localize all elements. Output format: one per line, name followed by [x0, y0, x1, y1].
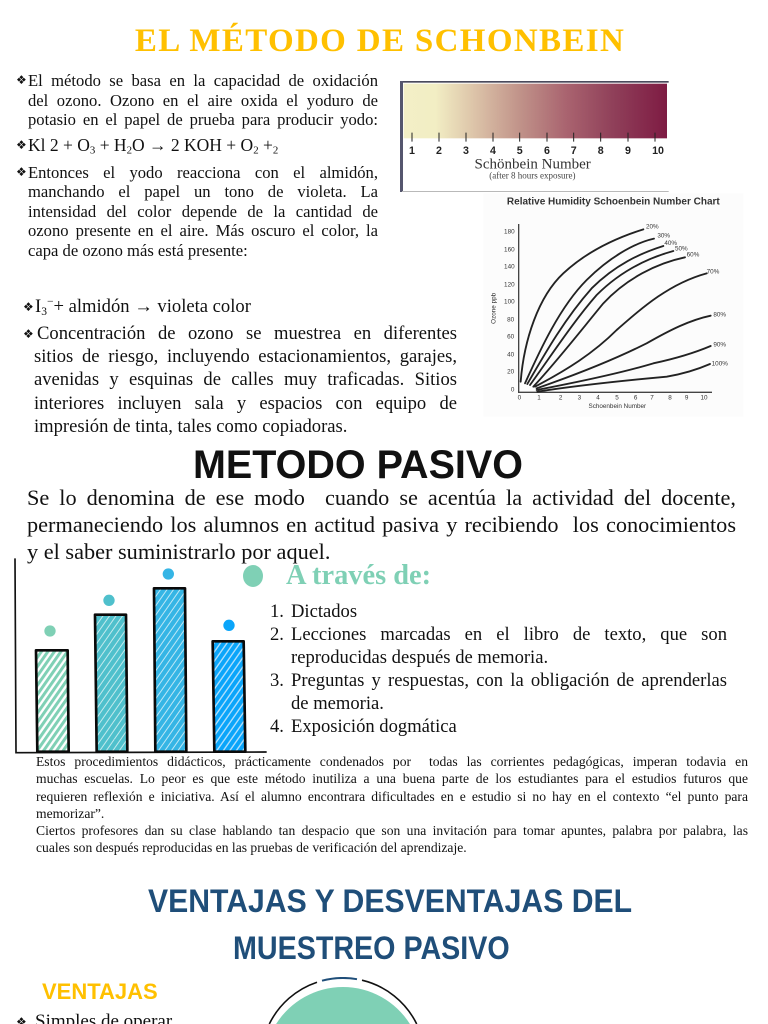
numbered list: passive procedures: reproducidas después de memoria. — [291, 647, 548, 668]
line chart: relative humidity Schoenbein number chart: 8 — [668, 394, 672, 401]
line chart: relative humidity Schoenbein number chart: 20% — [646, 223, 659, 230]
line chart: relative humidity Schoenbein number chart: 60% — [687, 252, 700, 259]
line chart: relative humidity Schoenbein number chart: 2 — [559, 394, 563, 401]
text block: starch reaction: ❖ — [16, 165, 27, 179]
line chart: relative humidity Schoenbein number chart: 80 — [507, 316, 515, 323]
text block: passive method definition: permaneciendo los alumnos en actitud pasiva y recibiendo los conocimientos — [27, 512, 736, 537]
color scale: Schönbein number strip: 10 — [652, 145, 664, 157]
line chart: relative humidity Schoenbein number chart: 40% — [664, 240, 677, 247]
heading: Metodo pasivo: METODO PASIVO — [193, 443, 523, 487]
numbered list: passive procedures: Lecciones marcadas en el libro de texto, que son — [291, 624, 727, 645]
color scale: Schönbein number strip: 1 — [409, 145, 415, 157]
line chart: relative humidity Schoenbein number chart: 70% — [707, 268, 720, 275]
title: El método de Schonbein: EL MÉTODO DE SCHONBEIN — [135, 23, 625, 59]
numbered list: passive procedures: de memoria. — [291, 693, 384, 714]
text block: starch reaction: ozono presente en el aire. Más oscuro el color, la — [28, 221, 378, 240]
text block: commentary on didactic procedures: memorizar”. — [36, 806, 104, 821]
line chart: relative humidity Schoenbein number chart: 0 — [511, 386, 515, 393]
text block: commentary on didactic procedures: Estos procedimientos didácticos, prácticamente condenados por todas las corrientes pedagógicas, imperan todavia en — [36, 754, 748, 769]
text block: starch reaction: capa de ozono más está presente: — [28, 241, 248, 260]
line chart: relative humidity Schoenbein number chart: 100 — [504, 299, 515, 306]
text block: commentary on didactic procedures: requieren reflexión e iniciativa. Así el alumno encontrara dificultades en e estudio si no hay en el contexto “el punto para — [36, 789, 748, 804]
line chart: relative humidity Schoenbein number chart: 6 — [634, 394, 638, 401]
heading: ventajas y desventajas: MUESTREO PASIVO — [233, 930, 510, 966]
line chart: relative humidity Schoenbein number chart: 5 — [615, 394, 619, 401]
numbered list: passive procedures — [270, 601, 727, 737]
text block: commentary on didactic procedures — [36, 754, 748, 855]
line chart: relative humidity Schoenbein number chart: 80% — [713, 312, 726, 319]
text block: ozone concentration sites: impresión de tinta, tales como copiadoras. — [34, 416, 347, 437]
icon: teal circle — [268, 977, 418, 1024]
text block: iodine starch formula: I3−+ almidón → violeta color — [35, 296, 251, 318]
color scale: Schönbein number strip: 7 — [571, 145, 577, 157]
text block: commentary on didactic procedures: Ciertos profesores dan su clase hablando tan despacio que son una invitación para tomar apuntes, palabra por palabra, las — [36, 823, 748, 838]
heading: ventajas y desventajas — [148, 883, 632, 966]
color scale: Schönbein number strip: 5 — [517, 145, 523, 157]
text block: ozone concentration sites: sitios de riesgo, incluyendo estacionamientos, garajes, — [34, 346, 457, 367]
line chart: relative humidity Schoenbein number chart: Schoenbein Number — [588, 403, 646, 410]
text block: ozone concentration sites — [23, 323, 457, 437]
text block: oxidation explanation — [16, 71, 378, 129]
line chart: relative humidity Schoenbein number chart: 7 — [650, 394, 654, 401]
text block: ozone concentration sites: Concentración de ozono se muestrea en diferentes — [37, 323, 457, 344]
text block: passive method definition: y el saber suministrarlo por aquel. — [27, 539, 330, 564]
line chart: relative humidity Schoenbein number chart: 10 — [700, 394, 708, 401]
numbered list: passive procedures: Dictados — [291, 601, 357, 622]
line chart: relative humidity Schoenbein number chart — [490, 197, 728, 410]
line chart: relative humidity Schoenbein number chart: 140 — [504, 264, 515, 271]
text block: oxidation explanation: potasio en el papel de prueba para producir yodo: — [28, 110, 378, 129]
text block: commentary on didactic procedures: cuales son después reproducidas en las pruebas de verificación del aprendizaje. — [36, 840, 467, 855]
color scale: Schönbein number strip: 2 — [436, 145, 442, 157]
text block: oxidation explanation: del ozono. Ozono en el aire oxida el yoduro de — [28, 90, 378, 110]
text block: ozone concentration sites: ❖ — [23, 327, 34, 341]
line chart: relative humidity Schoenbein number chart: 0 — [518, 394, 522, 401]
color scale: Schönbein number strip: 8 — [598, 145, 604, 157]
icon: teal dot — [243, 565, 263, 587]
numbered list: passive procedures: 1. — [270, 601, 284, 622]
text block: starch reaction — [16, 163, 378, 260]
color scale: Schönbein number strip: 4 — [490, 145, 496, 157]
line chart: relative humidity Schoenbein number chart: Ozone ppb — [490, 292, 497, 324]
text block: reaction formula: ❖ — [16, 138, 27, 152]
text block: starch reaction: manchando el papel un tono de violeta. La — [28, 182, 378, 201]
bar chart: hand-drawn hatched bars — [14, 558, 267, 754]
line chart: relative humidity Schoenbein number chart: 1 — [537, 394, 541, 401]
text block: reaction formula: Kl 2 + O3 + H2O → 2 KOH + O2 +2 — [28, 135, 278, 157]
heading: ventajas y desventajas: VENTAJAS Y DESVENTAJAS DEL — [148, 883, 632, 919]
text block: oxidation explanation: ❖ — [16, 73, 27, 87]
line chart: relative humidity Schoenbein number chart: 100% — [712, 360, 728, 367]
line chart: relative humidity Schoenbein number chart: 9 — [685, 394, 689, 401]
text block: passive method definition — [27, 485, 736, 564]
color scale: Schönbein number strip: 9 — [625, 145, 631, 157]
text block: ozone concentration sites: interiores incluyen sala y espacios con equipo de — [34, 393, 457, 414]
subheading: A través de: A través de: — [286, 560, 431, 591]
color scale: Schönbein number strip: 6 — [544, 145, 550, 157]
text block: starch reaction: Entonces el yodo reacciona con el almidón, — [28, 163, 378, 182]
numbered list: passive procedures: Exposición dogmática — [291, 716, 457, 737]
numbered list: passive procedures: 2. — [270, 624, 284, 645]
color scale: Schönbein number strip: 3 — [463, 145, 469, 157]
text block: starch reaction: intensidad del color depende de la cantidad de — [28, 202, 378, 221]
numbered list: passive procedures: 3. — [270, 670, 284, 691]
text block: iodine starch formula: ❖ — [23, 300, 34, 314]
line chart: relative humidity Schoenbein number chart: Relative Humidity Schoenbein Number Chart — [507, 197, 720, 208]
text block: commentary on didactic procedures: muchas escuelas. Lo peor es que este método inutiliza a una buena parte de los estudiantes para el estudios futuros que — [36, 771, 748, 786]
numbered list: passive procedures: 4. — [270, 716, 284, 737]
line chart: relative humidity Schoenbein number chart: 50% — [675, 246, 688, 253]
line chart: relative humidity Schoenbein number chart: 120 — [504, 281, 515, 288]
text block: oxidation explanation: El método se basa en la capacidad de oxidación — [28, 71, 378, 90]
line chart: relative humidity Schoenbein number chart: 20 — [507, 369, 515, 376]
numbered list: passive procedures: Preguntas y respuestas, con la obligación de aprenderlas — [291, 670, 727, 691]
color scale: Schönbein number strip: Schönbein Number — [475, 157, 591, 173]
color scale: Schönbein number strip: (after 8 hours exposure) — [489, 170, 575, 180]
line chart: relative humidity Schoenbein number chart: 60 — [507, 334, 515, 341]
line chart: relative humidity Schoenbein number chart: 160 — [504, 246, 515, 253]
text block: passive method definition: Se lo denomina de ese modo cuando se acentúa la actividad del docente, — [27, 485, 736, 510]
line chart: relative humidity Schoenbein number chart: 3 — [578, 394, 582, 401]
line chart: relative humidity Schoenbein number chart: 180 — [504, 229, 515, 236]
line chart: relative humidity Schoenbein number chart: 90% — [713, 341, 726, 348]
line chart: relative humidity Schoenbein number chart: 40 — [507, 351, 515, 358]
text block: ozone concentration sites: avenidas y esquinas de calles muy traficadas. Sitios — [34, 369, 457, 390]
color scale: Schönbein number strip — [400, 81, 669, 192]
line chart: relative humidity Schoenbein number chart: 4 — [596, 394, 600, 401]
subheading: ventajas: VENTAJAS — [42, 979, 158, 1004]
line chart: relative humidity Schoenbein number chart: 30% — [657, 233, 670, 240]
